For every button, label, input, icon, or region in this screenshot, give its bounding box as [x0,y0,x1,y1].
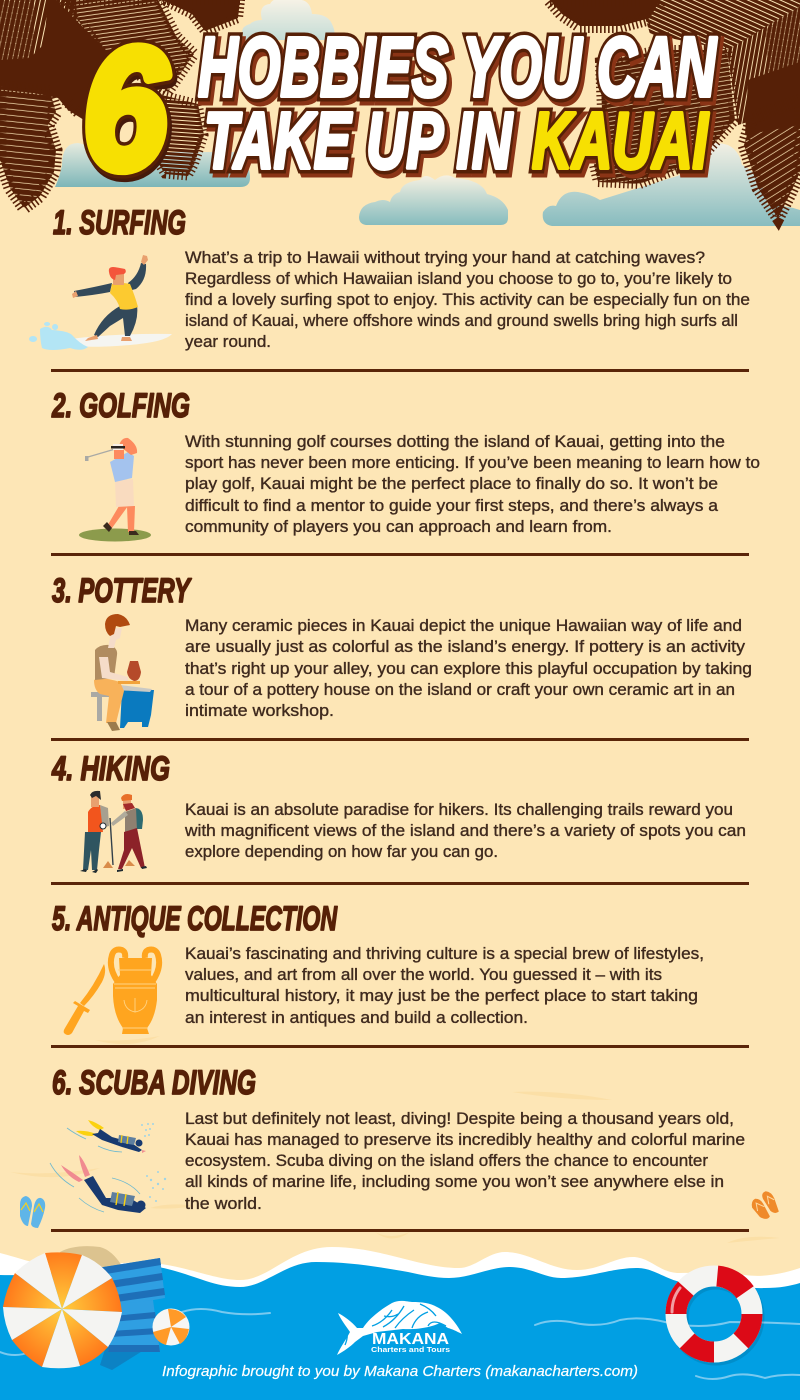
frond: top dark [550,0,660,26]
icon: beach towel [97,1258,165,1370]
text: antique collection: an interest in antiques and build a collection. [185,1009,528,1027]
icon: knife [64,964,105,1035]
heading: scuba diving: 6. SCUBA DIVING [52,1064,256,1102]
text: surfing: Regardless of which Hawaiian island you choose to go to, you’re likely to [185,270,732,288]
heading: surfing: 1. SURFING [53,204,186,242]
text: scuba diving: the world. [185,1195,262,1213]
divider [51,369,749,372]
cloud: left [55,143,250,187]
icon: right flip-flops [749,1189,783,1223]
numeral 6: 6 [85,17,170,209]
text: pottery [185,617,752,720]
text: scuba diving: Last but definitely not least, diving! Despite being a thousand years old, [185,1110,734,1128]
icon: life ring [672,1276,754,1355]
title [83,13,721,209]
section: pottery [52,572,752,731]
text: hiking: with magnificent views of the island and there’s a variety of spots you can [184,822,746,840]
text: antique collection [185,945,704,1027]
section: surfing [29,204,750,351]
text: surfing: year round. [185,333,271,351]
footer credit: Infographic brought to you by Makana Charters (makanacharters.com) [162,1363,638,1380]
text: scuba diving: Kauai has managed to preserve its incredibly healthy and colorful marine [185,1131,745,1149]
section: scuba diving [20,1064,783,1228]
footer: beach and sea [0,1246,800,1400]
text: pottery: intimate workshop. [185,702,334,720]
icon: beach umbrella [3,1252,122,1368]
heading: golfing: 2. GOLFING [51,387,190,425]
palm fronds: left [0,0,240,208]
divider [51,1229,749,1232]
palm fronds: right [550,0,800,218]
sand swooshes [10,1036,780,1243]
text: antique collection: Kauai’s fascinating and thriving culture is a special brew of lifestyles, [185,945,704,963]
frond: top-left crosshatch [0,0,80,62]
icon: diver two [50,1155,166,1213]
text: surfing [185,249,750,351]
heading: pottery: 3. POTTERY [52,572,192,610]
title line 2: TAKE UP IN [204,96,514,185]
white surf wave [0,1247,800,1300]
text: golfing: play golf, Kauai might be the perfect place to finally do so. It won’t be [185,475,718,493]
text: golfing: sport has never been more enticing. If you’ve been meaning to learn how to [185,454,760,472]
text: hiking: Kauai is an absolute paradise for hikers. Its challenging trails reward you [185,801,733,819]
sea ripples [0,1309,800,1379]
cloud: right [543,143,800,226]
title line 2: TAKE UP IN [204,96,514,185]
frond: upper feather [62,0,194,92]
section: hiking [51,750,746,873]
frond: dark mass [745,62,800,135]
logo wordmark: MAKANA [372,1331,449,1348]
frond: big feather behind title [594,50,735,184]
section: antique collection [52,900,704,1035]
section: golfing [51,387,760,542]
frond: lower right [744,100,800,218]
text: pottery: a tour of a pottery house on the island or craft your own ceramic art in an [185,681,735,699]
divider [51,1045,749,1048]
title line 2: KAUAI [535,100,712,189]
text: pottery: Many ceramic pieces in Kauai depict the unique Hawaiian way of life and [185,617,742,635]
icon: golfer [79,438,151,542]
frond: right cross lines [727,6,800,125]
frond: beneath the six [150,92,204,176]
text: pottery: that’s right up your alley, you can explore this playful occupation by taking [185,660,752,678]
divider [51,553,749,556]
frond: top stripes [640,0,800,50]
icon: straw hat [60,1246,122,1282]
numeral 6: 6 [83,13,168,205]
frond: lower left [0,86,56,208]
blue sea [0,1262,800,1400]
text: golfing: difficult to find a mentor to guide your first steps, and there’s always a [185,497,718,515]
text: scuba diving: all kinds of marine life, including some you won’t see anywhere else in [185,1173,724,1191]
cloud: lower centre [359,175,508,225]
icon: surfer [29,255,172,350]
heading: antique collection: 5. ANTIQUE COLLECTION [52,900,338,938]
text: surfing: island of Kauai, where offshore winds and ground swells bring high surfs all [185,312,738,330]
text: antique collection: multicultural history, it may just be the perfect place to start taking [185,987,698,1005]
text: golfing [185,433,760,536]
title line 2: TAKE UP IN [207,100,517,189]
numeral 6: 6 [83,13,168,205]
icon: left flip-flops [20,1196,45,1228]
icon: amphora [111,950,159,1034]
icon: hikers [80,791,147,873]
text: hiking: explore depending on how far you can go. [185,843,498,861]
icon: beach ball [152,1308,190,1346]
title line 2: KAUAI [532,96,709,185]
frond: top [163,0,240,31]
icon: potter [91,614,154,731]
text: scuba diving: ecosystem. Scuba diving on the island offers the chance to encounter [185,1152,709,1170]
divider [51,738,749,741]
frond: trunk mass [0,0,124,120]
logo: Makana dolphin [337,1301,462,1355]
title line 2: KAUAI [532,96,709,185]
text: surfing: find a lovely surfing spot to enjoy. This activity can be especially fun on the [185,291,750,309]
cloud: top centre [242,0,335,40]
icon: diver one [67,1120,154,1153]
text: hiking [184,801,746,861]
divider [51,882,749,885]
text: scuba diving [185,1110,745,1213]
text: pottery: are usually just as colorful as the island’s energy. If pottery is an activity [185,638,746,656]
text: surfing: What’s a trip to Hawaii without trying your hand at catching waves? [185,249,705,267]
text: antique collection: values, and art from all over the world. You guessed it – with its [185,966,662,984]
text: golfing: With stunning golf courses dotting the island of Kauai, getting into the [185,433,725,451]
heading: hiking: 4. HIKING [51,750,170,788]
logo tagline: Charters and Tours [371,1345,450,1354]
text: golfing: community of players you can approach and learn from. [185,518,612,536]
